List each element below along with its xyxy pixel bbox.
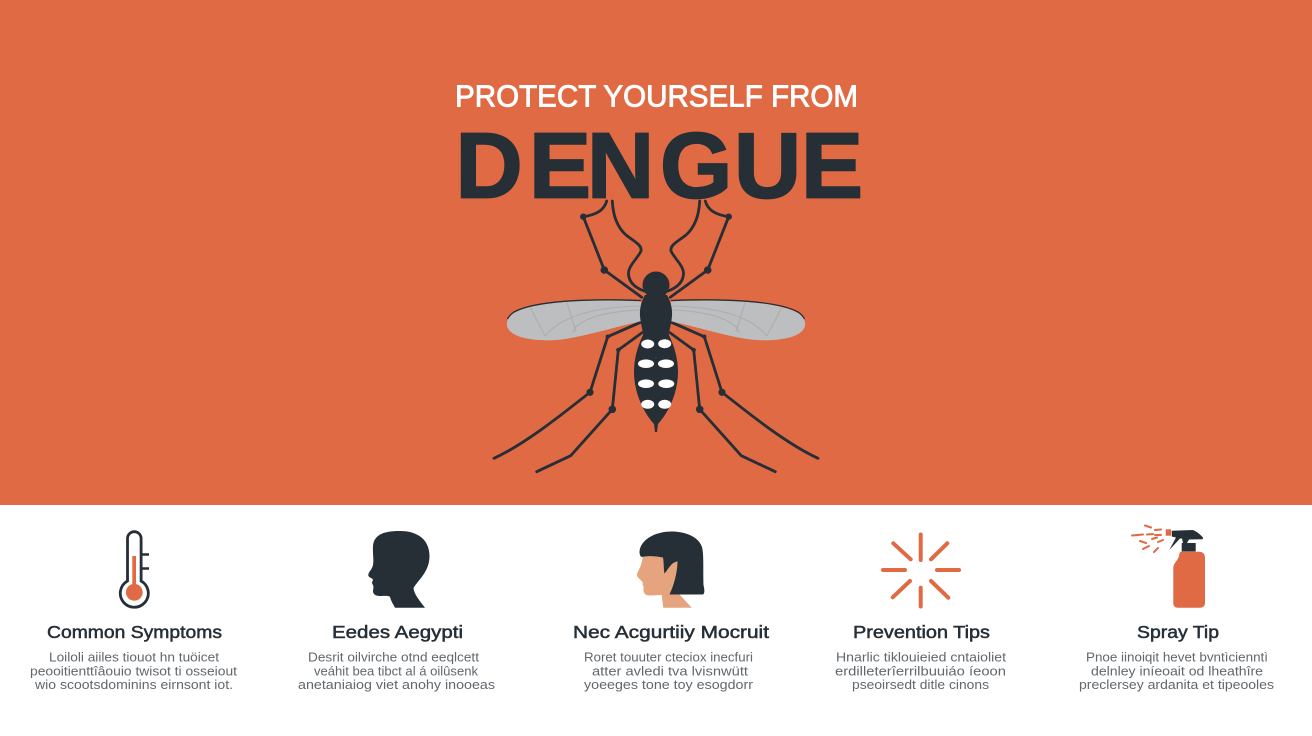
column: neck xyxy=(573,531,769,692)
body text: Desrit oilvirche otnd eeqlcett xyxy=(308,650,480,664)
body text: veáhit bea tibct al á oilûsenk xyxy=(314,664,479,678)
body text: Loiloli aiiles tiouot hn tuöicet xyxy=(49,650,220,664)
icon: spray bottle xyxy=(1132,526,1205,608)
mosquito thorax xyxy=(640,295,672,338)
body text: atter avledi tva lvisnwütt xyxy=(592,664,749,678)
body text xyxy=(1079,650,1274,692)
mosquito head xyxy=(642,272,670,298)
heading: Prevention Tips xyxy=(853,622,990,642)
body text: Pnoe iinoiqit hevet bvntìcienntì xyxy=(1086,650,1268,664)
mosquito abdomen spots xyxy=(638,339,674,409)
body text: Roret touuter cteciox inecfuri xyxy=(584,650,753,664)
panel: orange hero background xyxy=(0,0,1312,505)
column: prevention tips xyxy=(835,534,1007,692)
column: spray tip xyxy=(1079,526,1274,692)
heading: Spray Tip xyxy=(1137,622,1219,642)
body text: Hnarlic tiklouieied cntaioliet xyxy=(836,650,1007,664)
title: protect yourself from: PROTECT YOURSELF FROM xyxy=(455,78,858,114)
body text xyxy=(298,650,495,692)
right wing xyxy=(670,300,805,340)
body text xyxy=(30,650,238,692)
column: common symptoms xyxy=(30,532,238,692)
heading: Eedes Aegypti xyxy=(332,622,463,642)
body text: erdilleterîerrilbuuiáo íeoon xyxy=(835,664,1006,678)
icon: burst xyxy=(883,534,959,606)
mosquito antennae and front legs xyxy=(583,201,729,297)
body text: anetaniaiog viet anohy inooeas xyxy=(298,678,495,692)
body text xyxy=(835,650,1007,692)
mosquito abdomen xyxy=(634,333,678,432)
mosquito rear legs xyxy=(494,322,818,472)
icon: head with neck xyxy=(637,531,704,608)
body text xyxy=(584,650,753,692)
body text: yoeeges tone toy esogdorr xyxy=(584,678,753,692)
body text: delnley iníeoait od lheathîre xyxy=(1091,664,1263,678)
body text: wio scootsdominins eirnsont iot. xyxy=(34,678,233,692)
mosquito leg joints xyxy=(580,214,732,413)
left wing xyxy=(507,300,642,340)
icon: head silhouette xyxy=(368,531,430,608)
heading: Common Symptoms xyxy=(47,622,222,642)
body text: preclersey ardanita et tipeooles xyxy=(1079,678,1274,692)
heading: Nec Acgurtiiy Mocruit xyxy=(573,622,769,642)
panel: white footer background xyxy=(0,505,1312,736)
title: dengue: DENGUE xyxy=(456,114,863,218)
illustration: mosquito xyxy=(494,201,818,472)
icon: thermometer xyxy=(120,532,149,607)
column: eedes aegypti xyxy=(298,531,495,692)
body text: peooitienttîâouio twisot ti osseiout xyxy=(30,664,238,678)
body text: pseoirsedt ditle cinons xyxy=(852,678,989,692)
